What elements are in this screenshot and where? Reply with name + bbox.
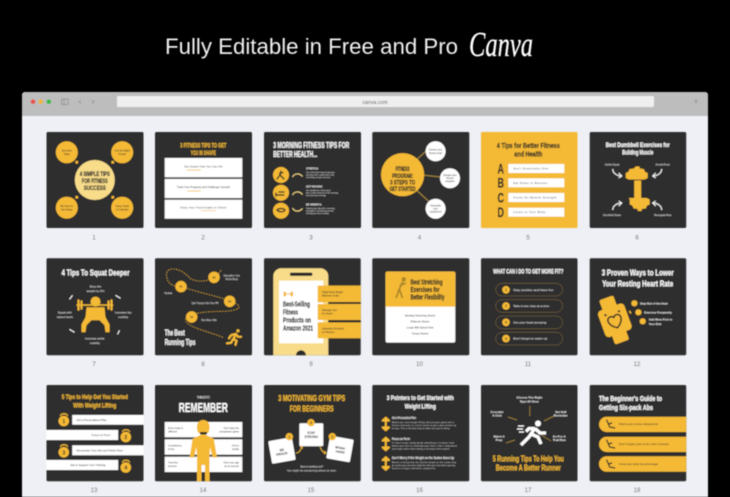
page numbers: 14 [200, 488, 207, 494]
heading: Products on [283, 317, 311, 324]
satellite labels: of Calories [116, 208, 129, 212]
labels: Squat with [58, 310, 72, 314]
tile 9: best-selling products: Massage Gun [322, 309, 338, 312]
smartwatch icon [593, 293, 636, 347]
heading: The Best [165, 328, 185, 337]
main circle: GET STARTED [390, 187, 416, 193]
list text: Add More Fish to [649, 317, 673, 321]
page numbers: 15 [308, 488, 315, 494]
row text: Track Your Progress and Challenge Yourself [177, 185, 230, 189]
box text: is key [168, 448, 175, 451]
box text: Trust the [168, 462, 178, 464]
main circle [381, 153, 424, 196]
heading: The Beginner's Guide to [599, 394, 662, 403]
list boxes [508, 164, 564, 217]
logo: Canva: Canva [469, 25, 533, 64]
exercise labels: Renegade Row [654, 214, 672, 217]
address bar: canva.com [362, 100, 388, 106]
pointer text: go up but your muscles might be what you have been gaining [392, 464, 455, 467]
list badges [629, 300, 646, 324]
page numbers: 18 [634, 488, 641, 494]
tip text: STRETCH [306, 166, 318, 170]
bar text: Remember Your Abs and Pelvic Floor [76, 448, 123, 452]
heading [283, 301, 313, 332]
page numbers [91, 236, 641, 494]
arrows [613, 169, 662, 210]
heading [599, 394, 662, 412]
list text: Focus On Muscle Strength [513, 196, 557, 200]
page numbers: 3 [309, 236, 313, 242]
page numbers: 11 [525, 362, 532, 368]
pill text: Get your heart pumping [513, 321, 547, 324]
pill text: Stay positive and have fun [513, 289, 554, 292]
labels: weight by 5% [87, 289, 105, 293]
tip text: morning off to a good start is by [306, 174, 334, 176]
browser toolbar [22, 92, 708, 116]
tile 7: squat deeper [46, 258, 144, 355]
box text [168, 427, 184, 468]
heading [179, 396, 228, 415]
card text: WORK [335, 445, 346, 451]
satellite labels: Foods [119, 152, 127, 156]
center circle: FOR FITNESS [82, 179, 108, 185]
heading: 4 Tips for Better Fitness [497, 141, 560, 150]
heading: Best Dumbbell Exercises for [606, 142, 670, 149]
tile 8: running tips: 01 [179, 285, 183, 289]
heading: WHAT CAN I DO TO GET MORE FIT? [493, 268, 563, 275]
tile 13: weight lifting tips: 4 [124, 466, 128, 472]
letters: A [497, 160, 504, 176]
page numbers: 13 [91, 488, 98, 494]
title: Fully Editable in Free and Pro [165, 34, 458, 59]
number badges [286, 419, 336, 440]
tile 4: fitness program: equipment [430, 210, 442, 214]
heading: FOR BEGINNERS [290, 404, 334, 414]
product boxes [318, 286, 361, 338]
heading: 4 Tips To Squat Deeper [62, 267, 130, 277]
person [189, 420, 217, 481]
dumbbell [626, 166, 650, 211]
step circles [426, 141, 460, 219]
list: Standing Hamstring Stretch [405, 314, 436, 317]
underlines [187, 170, 216, 211]
tip text [306, 166, 338, 215]
tip labels: A Club [492, 414, 502, 418]
stop labels: Hydrate [164, 292, 173, 295]
tile 4: fitness program: fitness [446, 177, 454, 180]
tile 11: what can I do: 2 [505, 304, 507, 308]
satellite labels: Get Sleep [61, 208, 73, 212]
heading: Running Tips [165, 338, 196, 347]
main circle: PROGRAM: [392, 174, 413, 180]
labels: mobility [90, 341, 100, 345]
pills [599, 417, 686, 472]
heading: 5 Running Tips To Help You [493, 454, 564, 464]
tile 13: weight lifting tips [46, 385, 144, 481]
satellite labels [61, 148, 130, 212]
heading: Getting Six-pack Abs [599, 403, 653, 412]
list [405, 314, 436, 335]
tile 14: things to remember: comparison game [219, 430, 240, 434]
list text [640, 301, 673, 326]
labels: Drop the [90, 284, 102, 288]
list text: Your Diet [649, 322, 661, 326]
exercise labels: Arnold Press [656, 164, 671, 166]
card [386, 272, 455, 343]
pill text: Know your body fat percentage [619, 463, 659, 466]
heading [606, 142, 670, 157]
tip labels [490, 396, 568, 442]
list text: Exercise Frequently [644, 310, 672, 314]
page numbers: 5 [526, 236, 530, 242]
circle icons [273, 167, 289, 219]
pointer text [392, 416, 457, 470]
tile 13: weight lifting tips: 3 [62, 450, 65, 456]
labels: Increase ankle [85, 336, 105, 340]
heading: Exercises for [411, 287, 440, 294]
stop labels [164, 274, 240, 322]
tile 6: dumbbell exercises [590, 132, 686, 228]
vertical dumbbell icons [382, 416, 390, 471]
letters: D [497, 204, 504, 220]
labels [57, 284, 132, 345]
tile 4: fitness program: Assess your [429, 148, 443, 152]
tile 9: best-selling products: for Workout [322, 331, 335, 334]
pointer text: It's best to get comfy doing something in its basic form [392, 442, 454, 444]
pointer text: and target what's best doing in all major form targets. [392, 448, 450, 450]
tip labels: Type Of Shoe [520, 400, 539, 404]
curved arrows [292, 174, 302, 211]
footer text: New to working out? [300, 466, 324, 468]
pill text: Take it one step at a time [513, 305, 550, 308]
card text: STAY [307, 431, 316, 435]
page numbers: 10 [416, 362, 423, 368]
tip text: Starting your day with a morning [306, 207, 335, 210]
heading: Better Flexibility [411, 294, 445, 301]
exercise labels: Goblet Squat [605, 164, 620, 166]
pointer text: Before you start weight lifting, discuss your goals with a [392, 421, 455, 424]
heading [273, 141, 349, 159]
tip labels: Set Self [555, 410, 566, 414]
tile 8: running tips: 02 [212, 275, 216, 279]
center circle: 4 SIMPLE TIPS [80, 172, 110, 178]
heading: Fitness [283, 309, 298, 316]
tile 4: fitness program [372, 132, 469, 228]
tile 14: things to remember: Find a [232, 444, 240, 448]
satellite labels: Exercise [62, 148, 72, 152]
tile 16: pointers [372, 385, 469, 481]
stretch figure [396, 278, 405, 297]
page numbers: 4 [418, 236, 422, 242]
tile 15: motivating gym tips: 3 [310, 421, 312, 425]
pointer text: fitness instructor or a local trainer to get a plan written up [392, 424, 456, 427]
pointer text: muscle in larger and more competitive. [392, 467, 436, 470]
letters: C [497, 189, 504, 205]
tile 18: six-pack abs [590, 385, 686, 481]
page numbers: 2 [201, 236, 205, 242]
stop labels: Strengthen Your [223, 274, 240, 277]
tip text: increases your energy. [306, 195, 327, 197]
satellite labels: Be Sure to [61, 204, 73, 208]
letters [497, 160, 504, 220]
heading: THINGS TO [197, 396, 210, 400]
tile 4: fitness program: program [445, 180, 455, 183]
heading: 3 FITNESS TIPS TO GET [180, 142, 226, 150]
heading: REMEMBER [179, 400, 228, 415]
tip text: One of the best ways to get your [306, 171, 335, 174]
page numbers: 1 [92, 236, 96, 242]
card text: HARD [335, 449, 346, 455]
tile 13: weight lifting tips: 1 [62, 419, 65, 425]
tile 15: motivating gym tips: 1 [288, 435, 290, 439]
heading: Best Stretching [411, 279, 443, 286]
page numbers: 8 [201, 362, 205, 368]
row text: Get Goals That You Can Hit [184, 164, 223, 168]
tip labels: Warm It [494, 434, 504, 438]
tile 15: motivating gym tips: 2 [331, 435, 333, 439]
bar text: Focus on Form [92, 433, 111, 437]
tip text: GET MOVING [306, 184, 323, 188]
tile 15: motivating gym tips [264, 385, 361, 481]
box text: Consistency [168, 444, 182, 448]
tip labels: Trail Run [553, 438, 566, 442]
tile 1: 4 simple tips [46, 132, 144, 228]
list: Triceps Stretch [412, 332, 429, 335]
tip text: take a walk. Exercise in the morning [306, 192, 338, 194]
heading [493, 454, 564, 472]
heading: Weight Lifting [405, 404, 436, 410]
connectors [416, 149, 440, 201]
page numbers: 9 [309, 362, 313, 368]
tile 9: best-selling products: For Relief [322, 312, 333, 315]
card text: PROUD [276, 451, 289, 457]
footer text: You might be wondering where to start. [287, 470, 337, 472]
labels: raised heels [57, 315, 73, 319]
tip text: BE MINDFUL [306, 202, 322, 206]
tip labels: Choose The Right [516, 396, 542, 400]
tile 8: running tips: 04 [190, 315, 194, 319]
sit-up icons [607, 420, 615, 468]
heading: Become A Better Runner [496, 464, 561, 472]
tile 14: things to remember: Don't play the [224, 427, 240, 430]
tile 11: what can I do: 1 [505, 288, 507, 292]
connector arrows [506, 406, 554, 443]
cards [268, 423, 354, 464]
tile 14: things to remember: Don't use age [224, 462, 240, 464]
page numbers: 16 [416, 488, 423, 494]
pointer text: Don't Worry If the Weight on the Scales Goes Up [392, 456, 454, 460]
heading: YOU IN SHAPE [191, 150, 216, 157]
tile 17: running tips [481, 385, 578, 481]
white bars [46, 415, 144, 470]
tile 14: things to remember: as an excuse [224, 465, 240, 468]
heading: BETTER HEALTH... [273, 150, 317, 159]
heading: 3 Pointers to Get Started with [387, 395, 454, 402]
tile 9: best-selling products: Bathroom Scale [322, 294, 340, 297]
heading [387, 395, 454, 410]
tile 2: 3 fitness tips [155, 132, 252, 228]
box text: process [168, 465, 178, 468]
list: Piriformis Stretch [410, 320, 430, 323]
pointer text: for you. This is the best way to make sure you're doing. [392, 427, 450, 430]
dumbbell icon [284, 292, 293, 296]
list text: Stay Out of the Heat [640, 301, 668, 305]
pointer text: Muscle is heavy than fat and the weight on the scales may [392, 461, 456, 464]
center circle [75, 160, 115, 200]
row text [177, 164, 230, 210]
pointer text: Get a Personalized Plan [392, 416, 416, 420]
pill text [619, 423, 670, 466]
heading [62, 394, 128, 410]
speed lines [517, 426, 524, 432]
exercise labels: Dumbbell Clean [603, 214, 621, 217]
card text [276, 431, 346, 457]
box text: different [168, 430, 177, 434]
tip text: Go outside for a short jog or [306, 189, 331, 192]
stop labels: Quit Trying to Set Your PR [192, 302, 219, 305]
heading [497, 141, 560, 158]
tip labels: Reminder [554, 414, 568, 418]
tile 10: best stretching [372, 258, 469, 355]
tile 4: fitness program: Assemble [430, 204, 442, 208]
heading [411, 279, 445, 301]
list text: Listen to Your Body [513, 210, 546, 214]
tile 12: resting heart rate [590, 258, 686, 355]
labels: mobility [118, 315, 129, 319]
white boxes [165, 422, 242, 472]
list text: Eat Smart to Recover [513, 181, 547, 185]
pill text [513, 289, 554, 341]
phone [273, 268, 328, 355]
connecting arrows [296, 446, 326, 454]
runner icon [227, 329, 241, 345]
tile 11: what can I do: 3 [505, 320, 507, 324]
numbered stops [175, 272, 235, 323]
address bar [117, 96, 654, 107]
list: Lunge With Spinal Twist [407, 326, 434, 329]
page numbers: 7 [92, 362, 96, 368]
list text: Don't Drastically Diet [513, 166, 549, 170]
white rows [165, 158, 242, 219]
tip text: stretching out your muscles. [306, 176, 331, 179]
heading: Your Resting Heart Rate [602, 278, 673, 288]
small arrows [70, 295, 120, 334]
tile 8: running tips [155, 258, 252, 355]
pill text: Work your rectus abdominis [619, 423, 659, 426]
pointer text: before you start to challenge your limits. Don't compromise [392, 444, 457, 448]
box text: Every body is [168, 427, 184, 430]
toolbar icons [62, 99, 94, 104]
bar text: Get a Personalized Plan [76, 418, 107, 422]
tile 3: morning fitness tips [264, 132, 361, 228]
browser window [22, 92, 708, 497]
tile 11: what can I do [481, 258, 578, 355]
heading [165, 328, 196, 347]
satellite labels: Get the Right [115, 148, 130, 152]
new tab plus: + [693, 96, 699, 106]
tile 4: fitness program: Design your [443, 174, 457, 177]
tile 9: best-selling products: Adjustable Dumbbell [322, 327, 344, 330]
pill text: Don't forget your inner core muscles [619, 443, 670, 446]
satellite circles [56, 141, 133, 219]
main circle: FITNESS [396, 167, 410, 173]
letters: B [497, 175, 504, 191]
window control dots [31, 99, 51, 104]
card text: BE [279, 448, 284, 452]
heading: 5 Tips to Help Get You Started [62, 394, 128, 401]
tip text: will help you focus all day. [306, 213, 329, 215]
heading: With Weight Lifting [73, 402, 116, 410]
tile 4: fitness program: your [433, 208, 438, 210]
satellite labels: Keep Track [116, 204, 129, 208]
kettlebells [60, 414, 130, 462]
weightlifter icon [76, 297, 113, 332]
page numbers: 12 [634, 362, 641, 368]
tile 14: things to remember: buddy [232, 448, 240, 451]
pills [496, 283, 563, 345]
stop labels: Run More Hills [201, 319, 217, 322]
bar text: Eat to Support Your Training [70, 463, 106, 467]
tile 11: what can I do: 4 [505, 337, 507, 341]
satellite labels: Daily [64, 152, 70, 156]
page numbers: 17 [525, 488, 532, 494]
exercise labels [603, 164, 672, 217]
main circle: 3 STEPS TO [390, 180, 415, 186]
heading [278, 394, 346, 414]
pill text: Don't forget to warm up [513, 338, 548, 341]
tip labels: Prep [496, 438, 503, 442]
tile 9: best-selling products: Digital Body Weight [322, 291, 343, 294]
tile 14: things to remember [155, 385, 252, 481]
page numbers: 6 [635, 236, 639, 242]
heading: Best-Selling [283, 301, 310, 308]
heading: 3 MOTIVATING GYM TIPS [278, 394, 346, 403]
tile 8: running tips: 03 [228, 299, 232, 303]
labels: Increase hip [115, 310, 132, 314]
title [165, 25, 533, 64]
heading: Amazon 2021 [283, 325, 313, 332]
heading: and Health [514, 149, 543, 158]
tip labels: Go For A [553, 434, 566, 438]
stop labels: Whole Body [226, 279, 239, 281]
tip text: meditation or breathing session [306, 210, 334, 212]
row text: Keep Your Food Intake in Check [180, 206, 227, 210]
center circle: SUCCESS [84, 186, 106, 192]
bar text [70, 418, 123, 467]
runner icon [521, 420, 546, 445]
card text: STRONG [304, 435, 319, 439]
tile 13: weight lifting tips: 2 [124, 435, 127, 441]
heading: 3 MORNING FITNESS TIPS FOR [273, 141, 349, 150]
tile 9: best-selling products [264, 258, 361, 355]
tile 5: 4 tips for better fitness [481, 132, 578, 228]
number badges [502, 286, 510, 342]
heading [602, 267, 674, 288]
pointer text: Focus on Form [392, 437, 410, 441]
heading [180, 142, 226, 157]
tip labels: Consider [490, 410, 504, 414]
tile 4: fitness program: fitness level [429, 152, 443, 155]
list text [513, 166, 557, 214]
heading: Building Muscle [622, 150, 653, 157]
footer text [287, 466, 337, 472]
dashed route [166, 269, 239, 337]
heading: 3 Proven Ways to Lower [602, 267, 674, 277]
